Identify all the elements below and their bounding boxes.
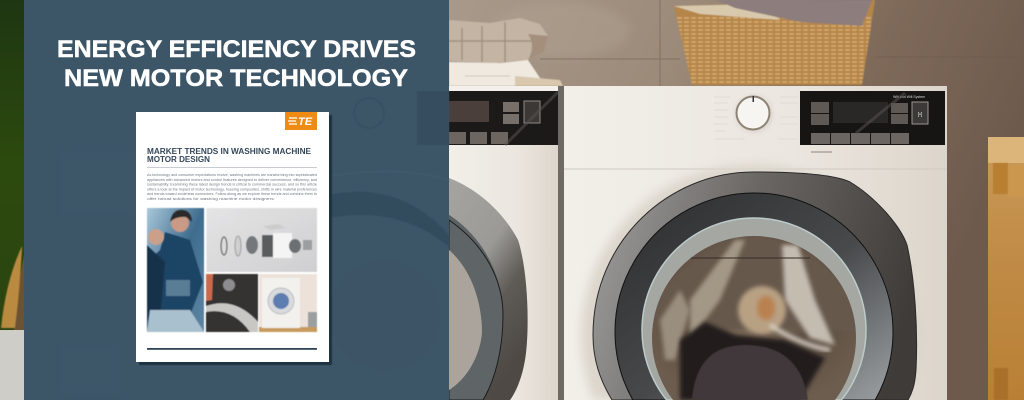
photo: washer drum — [206, 274, 258, 332]
document intro text: and trends toward ecoleness connectors. Follow along as we explore these trends and combine them to — [147, 192, 317, 196]
wooden box — [988, 137, 1024, 400]
wall tiles — [449, 0, 1024, 400]
logo: TE orange tab — [285, 112, 317, 130]
door handle mark — [811, 151, 832, 153]
photo: exploded motor — [206, 208, 317, 272]
left machine door — [449, 178, 528, 400]
laundry basket — [670, 0, 880, 85]
right machine control panel: [•] — [918, 112, 923, 118]
right machine control panel: Wifi and Wifi System — [893, 95, 925, 99]
photo: engineers — [147, 208, 204, 332]
document heading: MARKET TRENDS IN WASHING MACHINE — [147, 147, 312, 156]
title: ENERGY EFFICIENCY DRIVES — [57, 36, 416, 63]
document intro text: sustainability. Examining these latest design trends is critical to commercial success, and so this article — [147, 183, 317, 187]
title: NEW MOTOR TECHNOLOGY — [64, 65, 408, 92]
program labels — [714, 97, 798, 139]
plant and pot at far left — [0, 0, 24, 400]
document intro text: As technology and consumer expectations evolve, washing machines are transforming into sophisticated — [147, 173, 317, 177]
left washing machine — [449, 86, 564, 400]
control dial — [735, 95, 773, 133]
document intro text: appliances with advanced motors and control features designed to deliver convenience, efficiency, and — [147, 178, 317, 182]
left machine control panel — [449, 91, 558, 145]
right machine control panel — [800, 91, 945, 145]
document intro text: offer robust solutions for washing machine motor designers. — [147, 197, 275, 201]
right washing machine — [564, 86, 947, 400]
door shadow — [581, 164, 925, 400]
logo: TE orange tab: TE — [298, 116, 313, 128]
document cover — [136, 112, 332, 365]
document intro text: offers a look at the impact of motor technology, housing composites, shifts in wire material preferences — [147, 187, 317, 191]
title — [57, 36, 416, 92]
right machine door — [593, 172, 917, 400]
translucent blue panel — [24, 0, 449, 400]
document heading — [147, 147, 312, 164]
photo: white washer — [259, 274, 317, 332]
document heading: MOTOR DESIGN — [147, 155, 210, 164]
door glass — [642, 218, 866, 400]
document intro text — [147, 173, 317, 201]
towel stack — [449, 18, 563, 86]
